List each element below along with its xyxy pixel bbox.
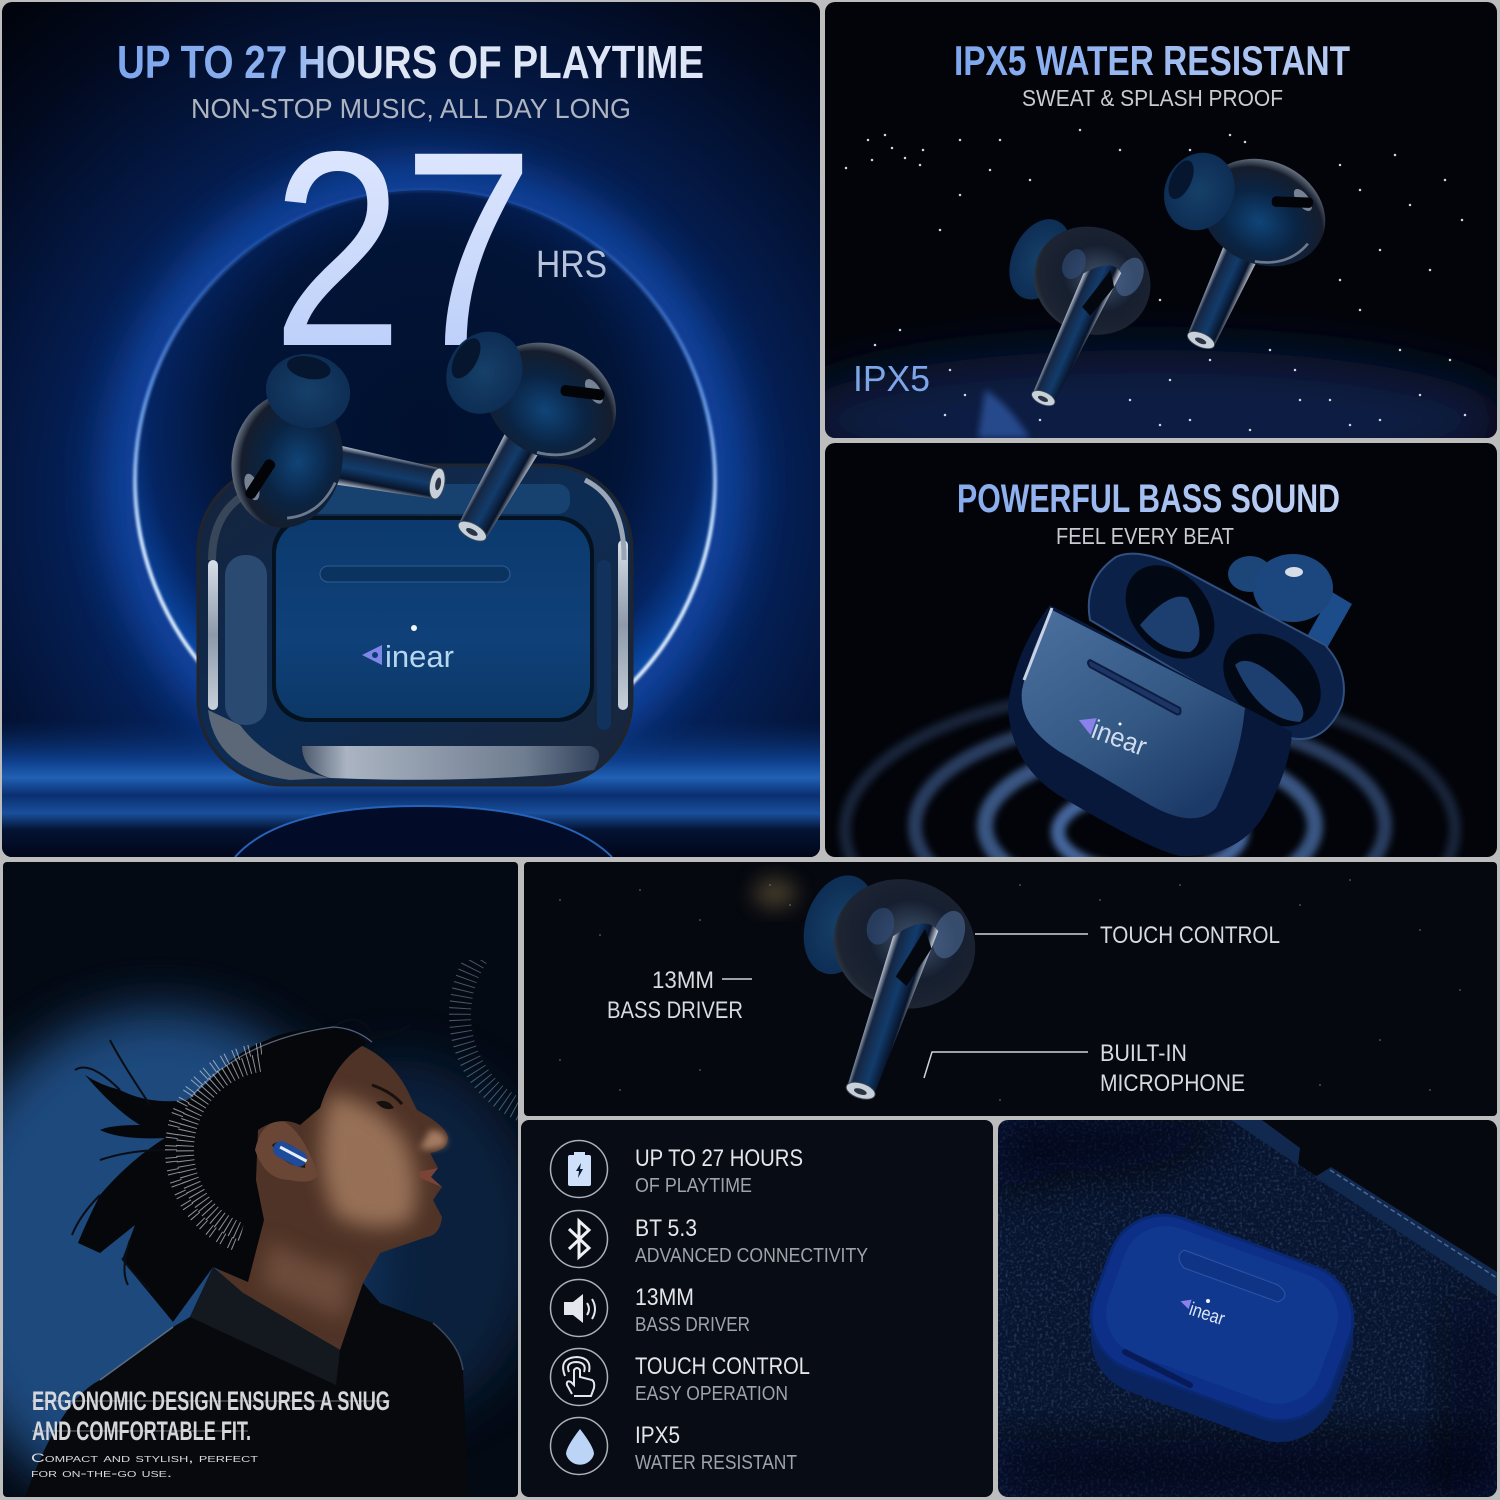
open case [1008,548,1344,856]
title: IPX5 WATER RESISTANT [954,37,1350,84]
case [1075,1199,1370,1458]
earbud: left [1009,219,1150,406]
jacket [25,1267,468,1497]
headline: AND COMFORTABLE FIT. [32,1416,251,1446]
callout: microphone [923,1044,1244,1091]
panel: ergonomic fit [3,862,518,1497]
woman portrait [25,1020,468,1497]
earbud [804,875,976,1100]
feature: driver: BASS DRIVER [635,1314,750,1336]
callout: microphone: MICROPHONE [1100,1070,1245,1097]
icon: speaker [564,1294,595,1323]
ripples [836,696,1464,857]
feature: playtime: UP TO 27 HOURS [635,1145,803,1172]
callout: microphone: BUILT-IN [1100,1040,1187,1067]
earbud: right [1164,152,1326,350]
panel: 27 hours of playtime [2,2,820,857]
logo: inear [1079,718,1147,755]
earbud behind case [1228,554,1352,650]
feature: playtime: OF PLAYTIME [635,1175,752,1197]
icon: water drop [566,1429,594,1465]
logo: inear: inear [385,639,454,674]
caption [32,1454,258,1477]
water droplets [846,130,1465,430]
title: POWERFUL BASS SOUND [957,477,1340,521]
callout: touch control: TOUCH CONTROL [1100,922,1280,949]
feature: water: WATER RESISTANT [635,1452,797,1474]
feature: touch: EASY OPERATION [635,1383,788,1405]
IPX5 label: IPX5 [853,358,930,399]
logo: inear [1176,1296,1228,1330]
feature: bluetooth: ADVANCED CONNECTIVITY [635,1245,868,1267]
earbud in ear [273,1141,308,1167]
title: UP TO 27 HOURS OF PLAYTIME [117,36,704,88]
sound wave ticks [165,1042,262,1250]
callout: bass driver: 13MM [652,967,714,994]
hair [78,1028,367,1322]
logo: inear: inear [1088,714,1151,762]
earbud: right [446,332,616,542]
earbud: left [231,354,446,528]
logo: inear: inear [1186,1299,1228,1330]
feature: playtime [550,1140,803,1198]
subtitle: FEEL EVERY BEAT [1056,523,1234,549]
icon: bluetooth [569,1221,589,1257]
unit HRS: HRS [536,244,607,286]
feature: water [550,1418,797,1474]
feature: water: IPX5 [635,1422,680,1449]
logo: inear [362,645,454,668]
feature: bluetooth [550,1210,868,1268]
headline: ERGONOMIC DESIGN ENSURES A SNUG [32,1386,390,1416]
caption: for on-the-go use. [31,1466,172,1480]
stars [560,880,1460,1100]
icon: touch hand [563,1357,594,1396]
feature: touch [550,1348,810,1406]
subtitle: NON-STOP MUSIC, ALL DAY LONG [191,93,631,124]
feature: bluetooth: BT 5.3 [635,1215,697,1242]
icon: battery [568,1152,591,1186]
panel: closed case on leather [998,1120,1497,1497]
feature: driver [550,1280,750,1336]
floor band [2,720,820,857]
headline [32,1391,390,1440]
caption: Compact and stylish, perfect [31,1451,258,1465]
sound wave arc [449,960,518,1120]
callout: bass driver: BASS DRIVER [607,997,743,1024]
leather strap [1231,1120,1497,1296]
panel: IPX5 water resistant [825,2,1497,438]
callout: bass driver [608,971,752,1018]
big number 27: 27 [272,93,534,404]
charging case [198,465,632,785]
feature: touch: TOUCH CONTROL [635,1353,810,1380]
panel: powerful bass sound [825,443,1497,857]
panel: feature list [521,1120,993,1497]
panel: earbud callouts [524,852,1497,1119]
subtitle: SWEAT & SPLASH PROOF [1022,85,1283,111]
ear [255,1122,318,1182]
feature: driver: 13MM [635,1284,694,1311]
